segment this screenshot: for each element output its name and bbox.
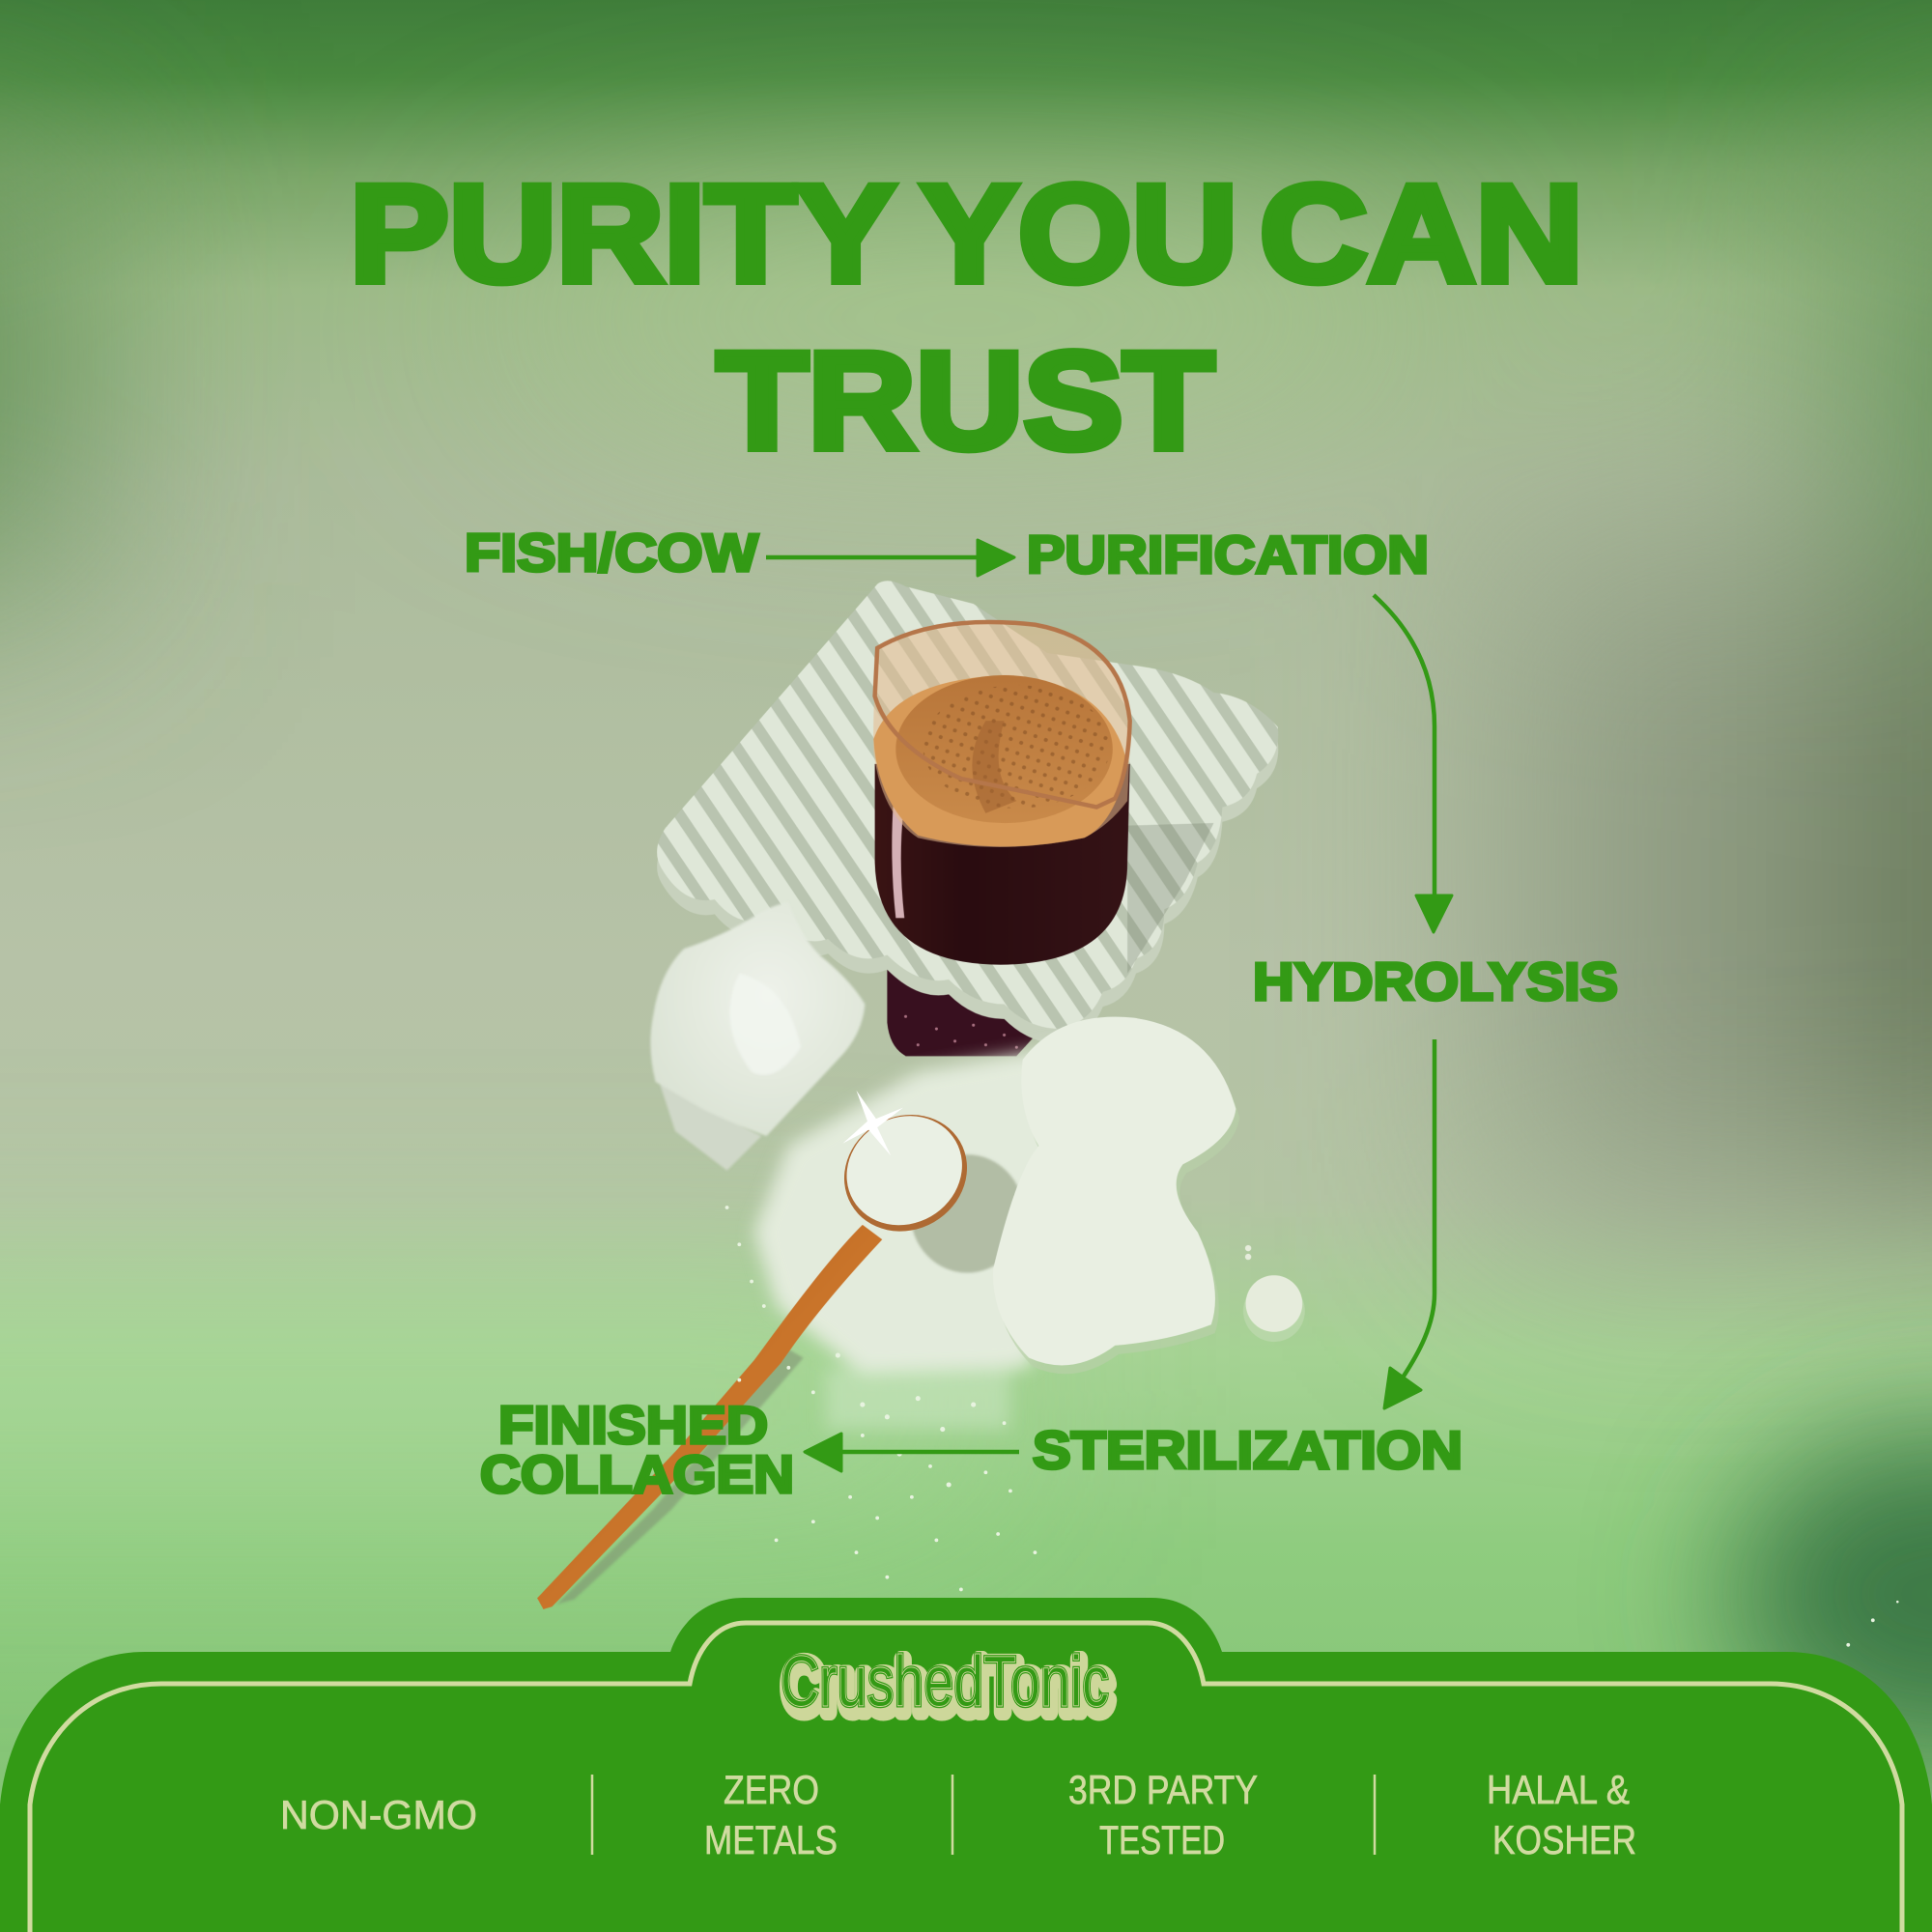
brand logo: CrushedTonic [781, 1641, 1109, 1721]
badge: zero metals: ZERO [724, 1767, 819, 1812]
badges [280, 1767, 1636, 1862]
product photo: beaker, coaster, foam, powder and spoon [537, 581, 1899, 1647]
badge: 3rd party tested: TESTED [1099, 1817, 1225, 1862]
badge: zero metals [704, 1767, 838, 1862]
coaster cast shadow [1127, 823, 1213, 974]
process step labels: FINISHED [498, 1395, 768, 1455]
title: YOU [921, 157, 1237, 311]
process step labels: HYDROLYSIS [1253, 952, 1618, 1011]
badge: halal and kosher: HALAL & [1487, 1767, 1630, 1812]
brand logo: CrushedTonic [783, 1647, 1112, 1727]
sparkle [842, 1091, 903, 1155]
badge: halal and kosher [1487, 1767, 1636, 1862]
process step labels [465, 523, 1618, 1504]
powder pile [754, 1047, 1072, 1430]
arrow: hydrolysis to sterilization [1384, 1039, 1435, 1408]
badge: 3rd party tested: 3RD PARTY [1068, 1767, 1258, 1812]
milk puddle [993, 1017, 1236, 1365]
process step labels: PURIFICATION [1027, 525, 1429, 584]
title [350, 157, 1583, 478]
spoon with powder [537, 1093, 988, 1609]
milk droplets [1243, 1245, 1305, 1342]
milk puddle shadow [997, 1026, 1239, 1374]
badge: non-GMO: NON-GMO [280, 1792, 477, 1837]
process step labels: COLLAGEN [480, 1444, 794, 1504]
badge: zero metals: METALS [704, 1817, 838, 1862]
title: CAN [1260, 157, 1583, 311]
footer panel [0, 1598, 1932, 1932]
striped scalloped coaster [657, 581, 1278, 1029]
glass beaker with dark liquid [873, 622, 1131, 965]
spoon bowl shadow [911, 1154, 1024, 1273]
brand logo: CrushedTonic [781, 1641, 1109, 1721]
badge: 3rd party tested [1068, 1767, 1258, 1862]
whipped foam [650, 902, 865, 1171]
arrow: sterilization to finished collagen [805, 1434, 1019, 1471]
title: PURITY [350, 157, 895, 311]
title: TRUST [717, 325, 1214, 478]
coaster shadow edge [657, 599, 1278, 1043]
arrow: fish/cow to purification [766, 540, 1014, 576]
dark liquid reflection [887, 949, 1041, 1056]
badge: halal and kosher: KOSHER [1492, 1817, 1636, 1862]
footer inner outline [30, 1623, 1902, 1932]
process step labels: FISH/COW [465, 523, 758, 582]
process step labels: STERILIZATION [1033, 1420, 1463, 1480]
powder specks [725, 1206, 1899, 1647]
arrow: purification to hydrolysis [1374, 595, 1452, 932]
